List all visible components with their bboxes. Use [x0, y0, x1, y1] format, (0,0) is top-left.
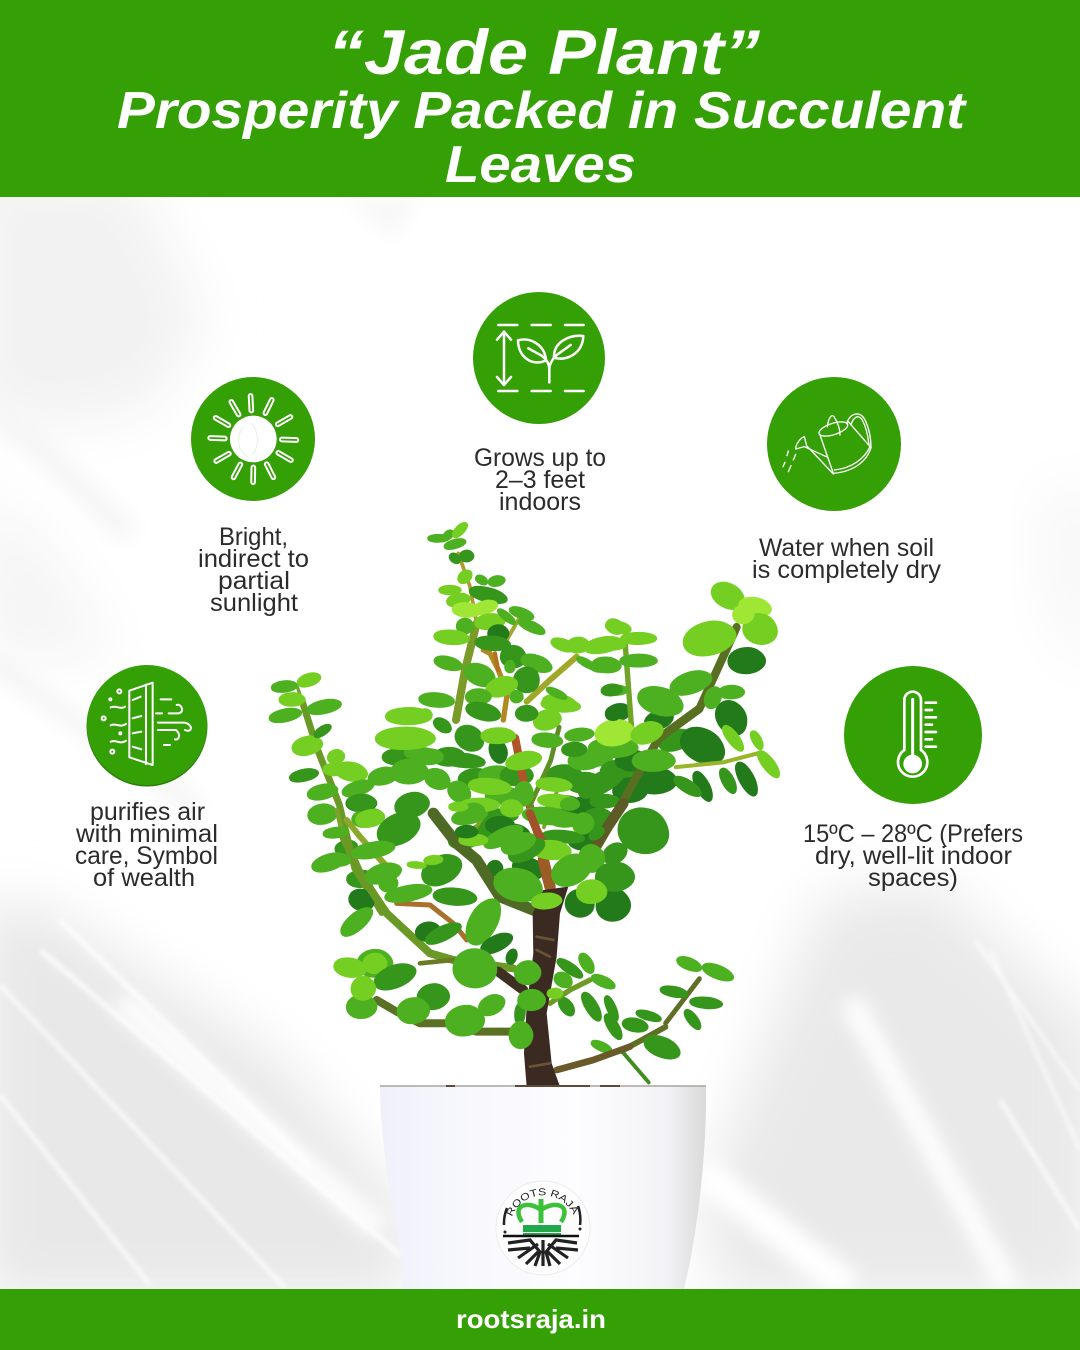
logo sticker: Roots Raja: ROOTS RAJA — [506, 1188, 578, 1216]
plant part: trunk and lower foliage — [330, 793, 633, 1087]
trunk and lower branches — [337, 803, 630, 1087]
text: light: Bright, — [219, 523, 288, 551]
icon: thermometer — [844, 666, 982, 804]
top shoot stems — [456, 553, 577, 720]
text: temperature: dry, well-lit indoor — [815, 842, 1012, 870]
text: height — [474, 444, 606, 516]
back dark leaves — [335, 649, 764, 886]
text: air purifying: of wealth — [93, 864, 195, 892]
footer website text: rootsraja.in — [456, 1304, 606, 1334]
text: air purifying: with minimal — [75, 820, 218, 848]
left branch and middle leaves — [270, 672, 594, 874]
text: temperature — [803, 820, 1023, 892]
icon: air purification — [86, 665, 208, 786]
title — [117, 18, 968, 194]
lower front leaves — [330, 793, 633, 1048]
text: height: 2–3 feet — [495, 466, 585, 494]
title: “Jade Plant” — [328, 18, 761, 88]
logo sticker: Roots Raja — [496, 1180, 590, 1276]
title: Prosperity Packed in Succulent — [117, 82, 968, 140]
text: temperature: 15ºC – 28ºC (Prefers — [803, 820, 1023, 848]
icon: sun — [191, 377, 315, 501]
lower back leaves — [348, 818, 629, 1054]
icon: plant height — [473, 292, 605, 424]
plant part: left, middle and right foliage — [270, 578, 781, 1082]
text: temperature: spaces) — [868, 864, 958, 892]
text: watering: Water when soil — [759, 534, 934, 562]
title: Leaves — [445, 136, 636, 194]
footer band — [0, 1289, 1080, 1350]
header band — [0, 0, 1080, 197]
top shoot leaves — [419, 522, 625, 723]
pot — [380, 1086, 706, 1289]
right branch leaves — [590, 578, 781, 1062]
plant: jade plant — [270, 522, 781, 1087]
text: light: sunlight — [210, 589, 298, 617]
plant part: top shoot — [419, 522, 625, 723]
text: height: indoors — [499, 488, 581, 516]
text: air purifying — [75, 798, 218, 892]
text: light: partial — [218, 567, 290, 595]
icon: watering can — [767, 377, 901, 511]
text: air purifying: purifies air — [90, 798, 205, 826]
text: air purifying: care, Symbol — [75, 842, 218, 870]
text: light: indirect to — [198, 545, 309, 573]
text: watering — [752, 534, 942, 584]
text: light — [198, 523, 309, 617]
text: height: Grows up to — [474, 444, 606, 472]
text: watering: is completely dry — [752, 556, 942, 584]
stems — [297, 627, 759, 1082]
